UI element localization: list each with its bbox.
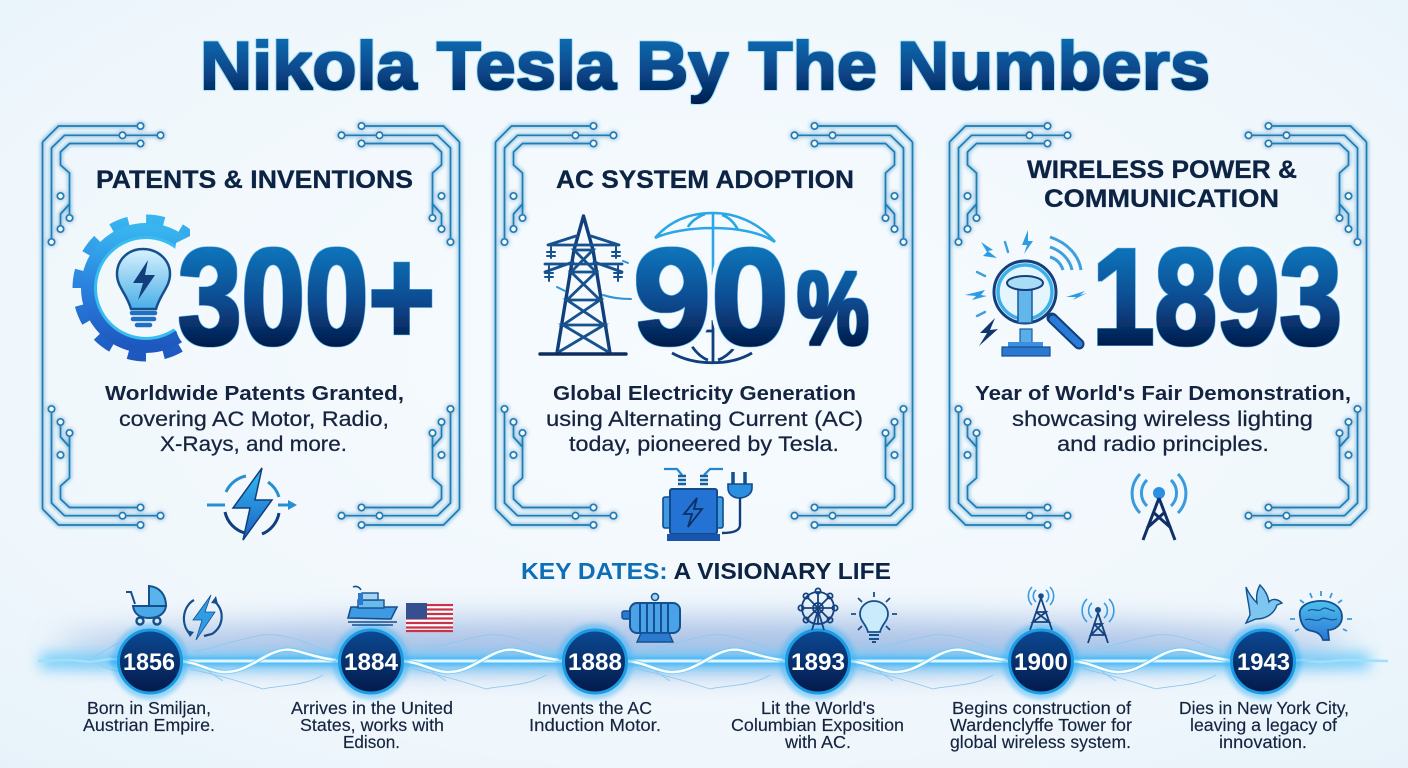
caption 1888: Invents the AC bbox=[537, 698, 652, 718]
node 1888 bbox=[557, 624, 633, 700]
caption 1943: innovation. bbox=[1219, 732, 1307, 752]
panel 2 description: using Alternating Current (AC) bbox=[546, 408, 863, 431]
panel 3 description: and radio principles. bbox=[1057, 433, 1269, 456]
icon: gear with light bulb bbox=[78, 220, 214, 356]
stat: 90%: % bbox=[797, 251, 869, 367]
caption 1893: Columbian Exposition bbox=[731, 715, 904, 735]
title: Nikola Tesla By The Numbers bbox=[200, 28, 1210, 104]
panel 3 description bbox=[975, 382, 1351, 456]
panel 3 description: showcasing wireless lighting bbox=[1012, 408, 1313, 431]
node 1943: 1943 bbox=[1237, 649, 1290, 676]
icon: electric motor bbox=[622, 594, 680, 642]
caption 1900 bbox=[950, 698, 1132, 752]
stat: 90% bbox=[633, 221, 869, 374]
panel 2 heading: AC SYSTEM ADOPTION bbox=[556, 166, 854, 194]
panel 1 description: Worldwide Patents Granted, bbox=[105, 382, 404, 405]
panel 3 heading bbox=[1027, 156, 1297, 213]
caption 1943: leaving a legacy of bbox=[1190, 715, 1337, 735]
caption 1856: Born in Smiljan, bbox=[87, 698, 211, 718]
caption 1884: Arrives in the United bbox=[291, 698, 453, 718]
panel: AC system adoption bbox=[496, 123, 912, 541]
node 1884 bbox=[333, 624, 409, 700]
panel 1 heading: PATENTS & INVENTIONS bbox=[96, 166, 413, 194]
panel 2 description: today, pioneered by Tesla. bbox=[569, 433, 839, 456]
icon: transformer and plug bbox=[663, 469, 752, 541]
icon: Tesla coil under magnifying glass bbox=[965, 230, 1087, 356]
icon: transmission tower bbox=[540, 216, 631, 354]
lightning line bbox=[38, 635, 1388, 689]
caption 1900: Wardenclyffe Tower for bbox=[950, 715, 1132, 735]
caption 1884 bbox=[291, 698, 453, 752]
node 1888: 1888 bbox=[568, 649, 622, 676]
caption 1943: Dies in New York City, bbox=[1179, 698, 1349, 718]
icon: baby stroller bbox=[126, 586, 166, 624]
icon: globe behind the number bbox=[655, 213, 775, 363]
icon: dove bbox=[1246, 585, 1282, 623]
caption 1943 bbox=[1179, 698, 1349, 752]
icon: brain with rays bbox=[1290, 591, 1352, 640]
node 1893 bbox=[780, 624, 856, 700]
panel 2 description: Global Electricity Generation bbox=[553, 382, 856, 405]
node 1884: 1884 bbox=[344, 649, 399, 676]
stat: 90%: 90 bbox=[633, 221, 789, 374]
section heading: key dates: KEY DATES: A VISIONARY LIFE bbox=[521, 558, 891, 584]
panel 3 circuit frame bbox=[950, 123, 1366, 528]
caption 1888 bbox=[529, 698, 661, 735]
node 1943 bbox=[1225, 624, 1301, 700]
caption 1856 bbox=[83, 698, 215, 735]
icon: American flag bbox=[406, 603, 453, 632]
icon: idea bulb with rays bbox=[851, 592, 897, 642]
panel 2 description bbox=[546, 382, 863, 456]
panel: wireless power and communication bbox=[950, 123, 1366, 540]
icon: lightning bolt with arrow bbox=[207, 468, 297, 540]
stat: 300+: 300+ bbox=[178, 221, 435, 374]
caption 1893 bbox=[731, 698, 904, 752]
caption 1888: Induction Motor. bbox=[529, 715, 661, 735]
node 1900 bbox=[1003, 624, 1079, 700]
panel: patents and inventions bbox=[42, 123, 460, 540]
icon: radio tower one bbox=[1028, 587, 1054, 630]
icon: radio antenna bbox=[1132, 474, 1186, 540]
icon: Ferris wheel bbox=[798, 588, 838, 630]
icon: steamship bbox=[348, 586, 397, 625]
node 1900: 1900 bbox=[1014, 649, 1068, 676]
caption 1893: with AC. bbox=[784, 732, 851, 752]
node 1856: 1856 bbox=[123, 649, 175, 676]
node 1856 bbox=[112, 624, 188, 700]
panel 1 circuit frame bbox=[42, 123, 460, 528]
panel 1 description: covering AC Motor, Radio, bbox=[119, 408, 389, 431]
caption 1856: Austrian Empire. bbox=[83, 715, 215, 735]
timeline bbox=[38, 585, 1388, 752]
caption 1893: Lit the World's bbox=[761, 698, 875, 718]
caption 1884: States, works with bbox=[300, 715, 444, 735]
caption 1900: Begins construction of bbox=[952, 698, 1131, 718]
node 1893: 1893 bbox=[791, 649, 845, 676]
panel 3 description: Year of World's Fair Demonstration, bbox=[975, 382, 1351, 405]
panel 1 description: X-Rays, and more. bbox=[160, 433, 347, 456]
panel 1 description bbox=[105, 382, 404, 456]
icon: lightning with cycle arrows bbox=[184, 595, 222, 640]
panel 3 heading: COMMUNICATION bbox=[1044, 185, 1279, 213]
panel 2 circuit frame bbox=[496, 123, 912, 528]
caption 1884: Edison. bbox=[343, 732, 400, 752]
shadow band behind timeline bbox=[54, 618, 1354, 672]
panel 3 heading: WIRELESS POWER & bbox=[1027, 156, 1297, 184]
caption 1900: global wireless system. bbox=[950, 732, 1131, 752]
stat: 1893: 1893 bbox=[1092, 221, 1342, 374]
icon: radio tower two bbox=[1082, 599, 1114, 643]
